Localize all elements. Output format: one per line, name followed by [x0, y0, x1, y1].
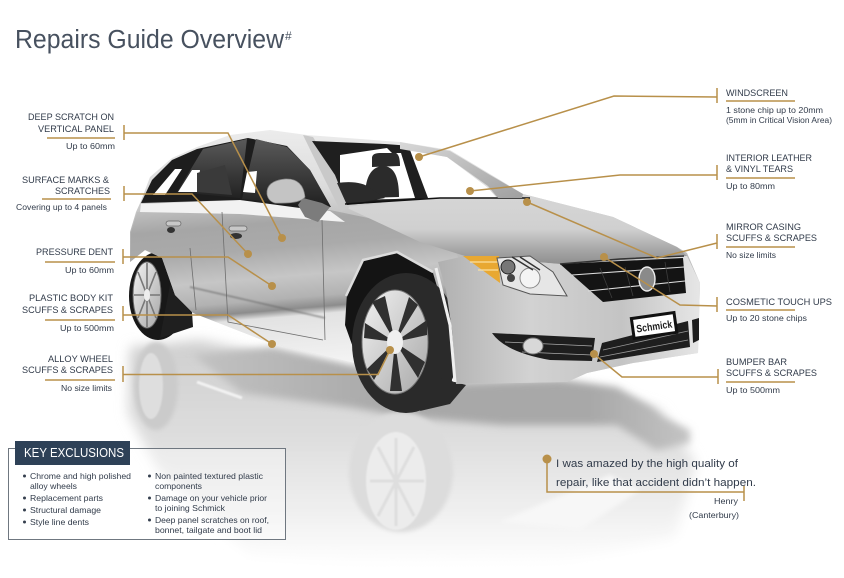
car: white body highlights: [140, 200, 345, 222]
heading: key exclusions: KEY EXCLUSIONS: [24, 445, 124, 460]
callout: surface marks and scratches: [16, 174, 252, 258]
list: exclusions right column: Deep panel scratches on roof,: [155, 515, 269, 525]
car: licence plate: [630, 311, 678, 340]
list: exclusions right column: Non painted textured plastic: [155, 471, 263, 481]
callout: interior leather and vinyl tears: & VINYL TEARS: [726, 163, 793, 174]
list: exclusions right column: Damage on your vehicle prior: [155, 493, 267, 503]
callout: surface marks and scratches: SCRATCHES: [55, 185, 110, 196]
callout: plastic body kit: PLASTIC BODY KIT: [29, 292, 113, 303]
list: exclusions left column: Style line dents: [30, 517, 89, 527]
list: exclusions right column: to joining Schmick: [155, 503, 226, 513]
callout: pressure dent: Up to 60mm: [65, 265, 114, 275]
car: front rim: [362, 290, 428, 394]
car: upper grille: [560, 258, 686, 302]
car: [129, 130, 700, 413]
callout: deep scratch on vertical panel: DEEP SCRATCH ON: [28, 111, 114, 122]
callout: pressure dent: PRESSURE DENT: [36, 246, 113, 257]
testimonial quote: I was amazed by the high quality of: [556, 458, 739, 470]
callout: cosmetic touch ups: [600, 253, 832, 323]
car: body silhouette: [130, 130, 700, 384]
callout: alloy wheel: [22, 346, 394, 393]
callout: deep scratch on vertical panel: [28, 111, 286, 242]
testimonial quote: (Canterbury): [689, 510, 739, 520]
callout: bumper bar: SCUFFS & SCRAPES: [726, 367, 817, 378]
callout: interior leather and vinyl tears: INTERIOR LEATHER: [726, 152, 812, 163]
car: far A pillar: [400, 142, 523, 198]
list: exclusions right column: bonnet, tailgate and boot lid: [155, 525, 262, 535]
callout: alloy wheel: ALLOY WHEEL: [48, 353, 113, 364]
callout: bumper bar: Up to 500mm: [726, 385, 780, 395]
callout: plastic body kit: [22, 292, 276, 348]
car: arch lip highlight: [346, 252, 433, 296]
car: lower right intake: [597, 318, 699, 362]
list: exclusions left column: [23, 471, 131, 527]
callout: plastic body kit: Up to 500mm: [60, 323, 114, 333]
car: door handles: [166, 221, 247, 239]
callout: mirror casing: [523, 198, 817, 260]
car: front bumper: [438, 256, 700, 384]
callout: mirror casing: SCUFFS & SCRAPES: [726, 232, 817, 243]
list: exclusions left column: alloy wheels: [30, 481, 77, 491]
car: bumper arch edge highlight: [436, 268, 455, 382]
list: exclusions left column: Structural damage: [30, 505, 101, 515]
callout: windscreen: (5mm in Critical Vision Area): [726, 115, 832, 125]
callout: bumper bar: [590, 350, 817, 395]
car: side windows: [141, 138, 331, 208]
list: exclusions right column: [148, 471, 269, 535]
car: body crease and door lines: [190, 212, 325, 340]
car: lower left intake and fog lamp: [492, 333, 595, 361]
callout: surface marks and scratches: Covering up to 4 panels: [16, 202, 107, 212]
callout: mirror casing: No size limits: [726, 250, 776, 260]
callout: interior leather and vinyl tears: [466, 152, 812, 195]
callout: alloy wheel: No size limits: [61, 383, 112, 393]
callout: mirror casing: MIRROR CASING: [726, 221, 801, 232]
car: near A pillar: [303, 135, 349, 212]
testimonial quote: [542, 454, 756, 520]
car reflection on the ground: [128, 340, 696, 566]
title: Repairs Guide Overview: [15, 26, 285, 54]
list: exclusions right column: components: [155, 481, 202, 491]
car: front tyre: [352, 273, 466, 413]
callout: interior leather and vinyl tears: Up to 80mm: [726, 181, 775, 191]
car: rear wheel: [129, 252, 193, 340]
car: windscreen: [312, 141, 530, 205]
callout: windscreen: WINDSCREEN: [726, 87, 788, 98]
car: headlight: [463, 256, 567, 296]
car: front wheel arch: [345, 252, 452, 400]
callout: cosmetic touch ups: Up to 20 stone chips: [726, 313, 807, 323]
car: mirror: [267, 179, 330, 222]
heading: key exclusions: [15, 441, 130, 465]
car: licence plate: Schmick: [636, 319, 673, 335]
callout: cosmetic touch ups: COSMETIC TOUCH UPS: [726, 296, 832, 307]
callout: alloy wheel: SCUFFS & SCRAPES: [22, 364, 113, 375]
callout: pressure dent: [36, 246, 276, 290]
callout: surface marks and scratches: SURFACE MARKS &: [22, 174, 110, 185]
callout: deep scratch on vertical panel: VERTICAL PANEL: [38, 123, 114, 134]
list: exclusions left column: Replacement parts: [30, 493, 103, 503]
callout: windscreen: 1 stone chip up to 20mm: [726, 105, 823, 115]
callout: deep scratch on vertical panel: Up to 60mm: [66, 141, 115, 151]
callout: plastic body kit: SCUFFS & SCRAPES: [22, 304, 113, 315]
car: hood lip: [560, 256, 684, 264]
car: door side panel: [130, 205, 470, 384]
testimonial quote: Henry: [714, 496, 739, 506]
title: #: [285, 29, 292, 43]
car: hood: [345, 194, 687, 264]
callout: windscreen: [415, 87, 832, 161]
callout: bumper bar: BUMPER BAR: [726, 356, 787, 367]
list: exclusions left column: Chrome and high polished: [30, 471, 131, 481]
panel: key exclusions: [8, 441, 286, 540]
testimonial quote: repair, like that accident didn’t happen.: [556, 477, 756, 489]
